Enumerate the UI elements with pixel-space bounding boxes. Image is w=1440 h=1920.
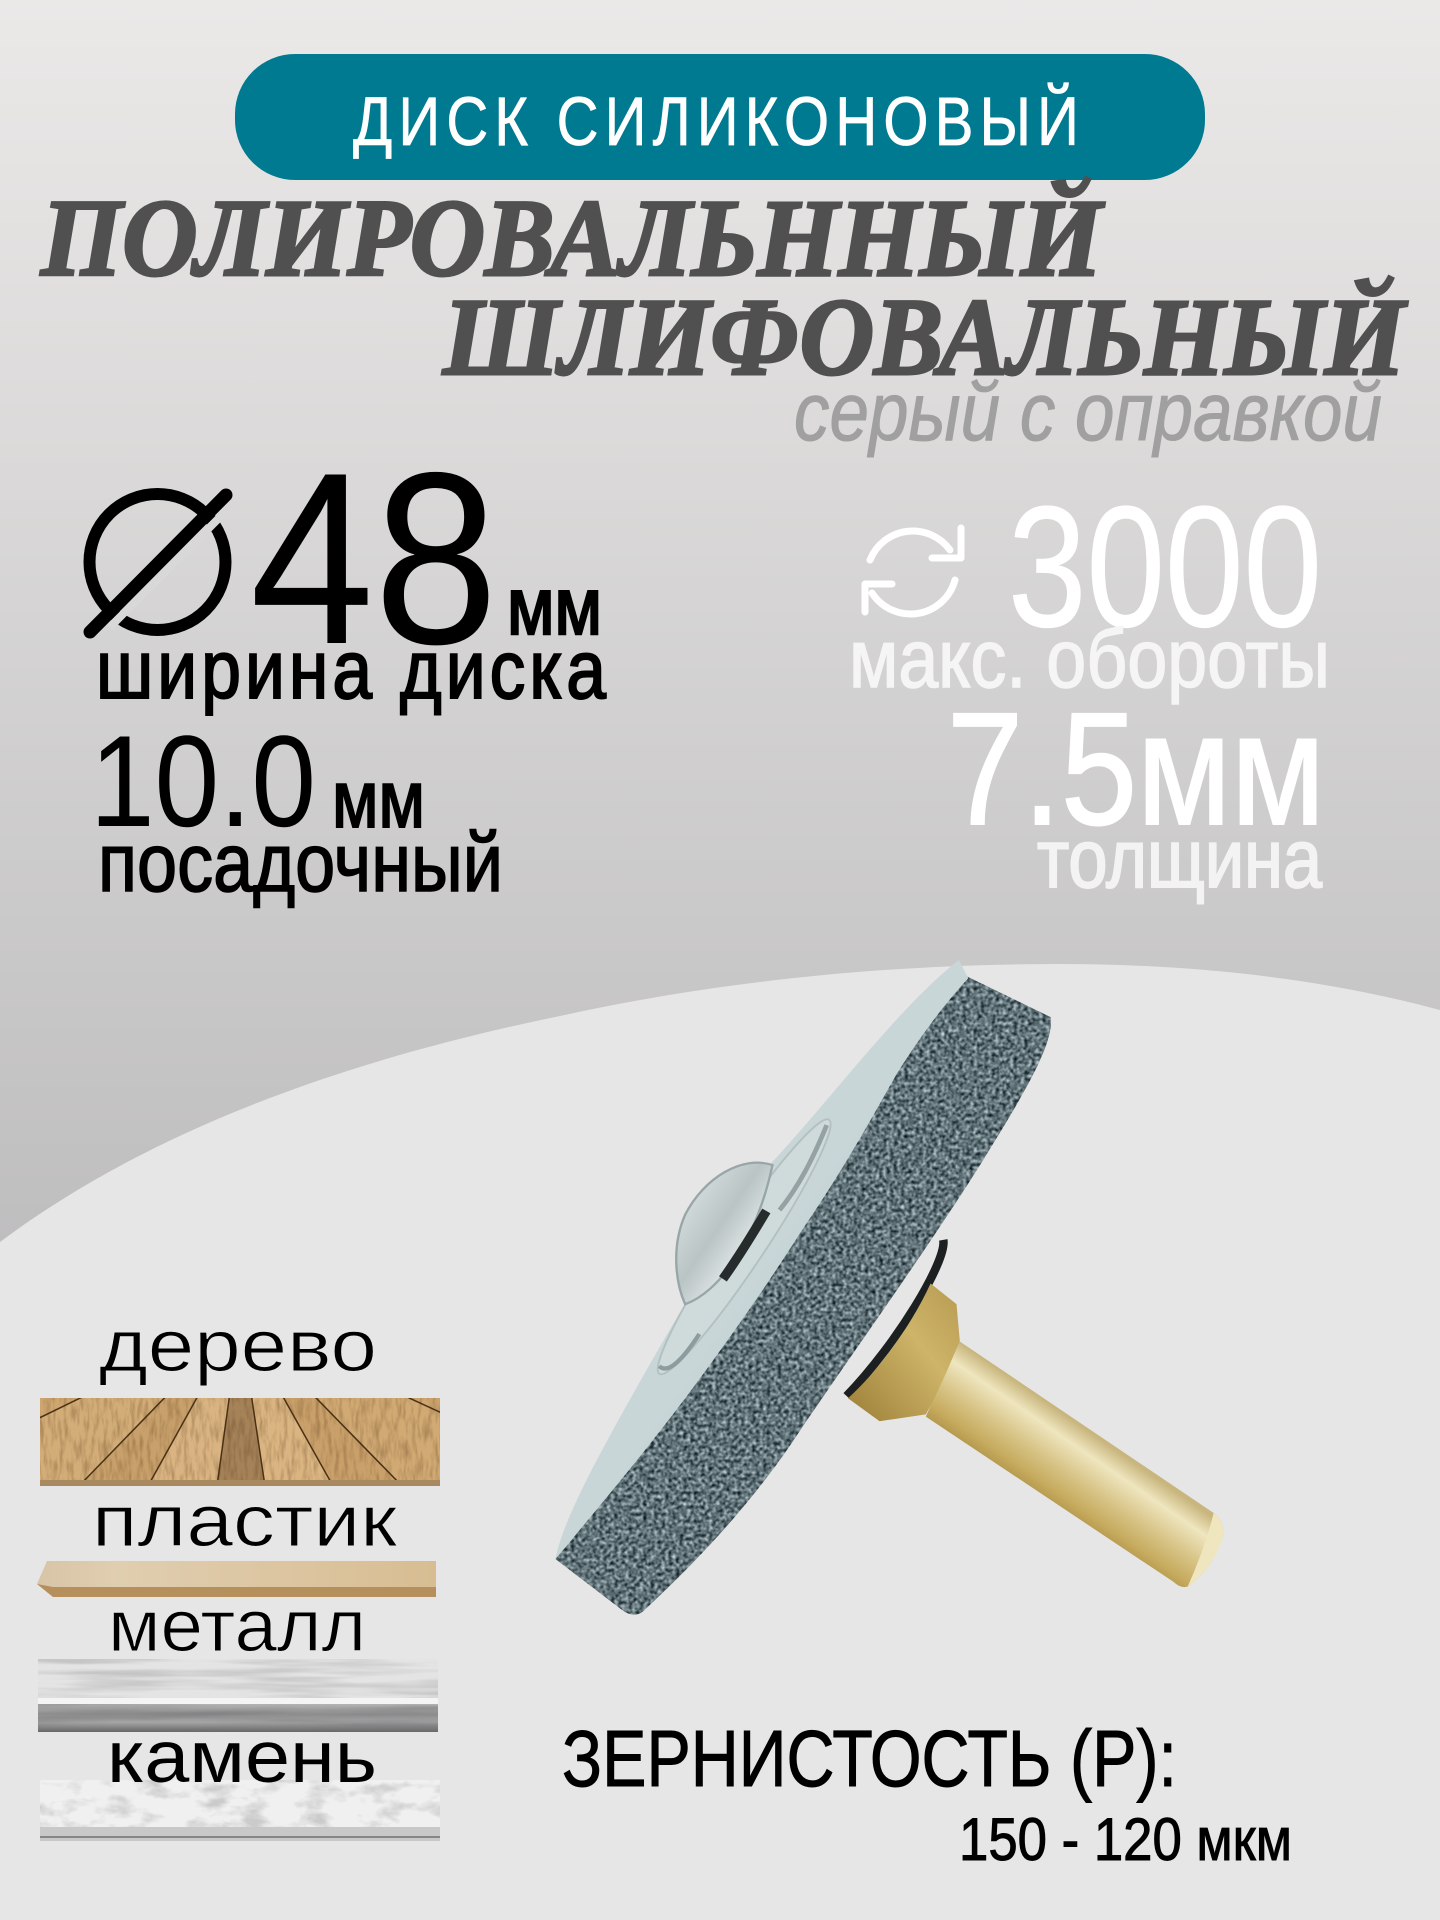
title line: grinding: ШЛИФОВАЛЬНЫЙ [442, 275, 1408, 398]
thickness caption: толщина [1037, 812, 1323, 905]
label: plastic: пластик [92, 1481, 398, 1562]
background gradient [0, 0, 1440, 1300]
bore unit: мм [332, 755, 425, 845]
grit heading: ЗЕРНИСТОСТЬ (Р): [562, 1714, 1177, 1803]
label: metal: металл [108, 1586, 366, 1667]
disc diameter spec [90, 421, 607, 716]
icon: rotation arrows [865, 528, 961, 614]
mounting flange [643, 1109, 846, 1384]
materials list [37, 1332, 440, 1841]
bore caption: посадочный [98, 816, 503, 909]
product photo: grinding disc on shank [555, 960, 1224, 1615]
screw head [676, 1163, 772, 1304]
swatch: plastic bar [37, 1561, 436, 1597]
bore value: 10.0 [90, 708, 316, 854]
title line: polishing: ПОЛИРОВАЛЬННЫЙ [40, 176, 1105, 299]
label: stone: камень [107, 1717, 377, 1798]
thickness spec [947, 679, 1325, 905]
swatch: wood planks [40, 1398, 440, 1486]
diameter value: 48 [250, 421, 498, 695]
label: wood: дерево [99, 1306, 377, 1387]
brass collar [848, 1284, 960, 1421]
swatch: stone slab [40, 1780, 440, 1841]
icon: diameter symbol [90, 494, 234, 632]
bore spec [90, 708, 503, 909]
swatch: metal bar [38, 1659, 438, 1732]
top pill header [235, 54, 1205, 180]
rpm value: 3000 [1008, 471, 1322, 663]
disc face [555, 960, 968, 1559]
disc abrasive rim [555, 974, 1051, 1615]
lower light arc panel [0, 964, 1440, 1920]
top pill header: ДИСК СИЛИКОНОВЫЙ [353, 82, 1079, 160]
diameter caption: ширина диска [96, 624, 607, 716]
rpm spec [849, 471, 1330, 705]
grit value: 150 - 120 мкм [959, 1806, 1292, 1873]
thickness value: 7.5мм [947, 679, 1325, 858]
shank [926, 1341, 1224, 1587]
diameter unit: мм [507, 562, 602, 652]
rpm caption: макс. обороты [849, 612, 1330, 705]
black washer [847, 1240, 943, 1396]
